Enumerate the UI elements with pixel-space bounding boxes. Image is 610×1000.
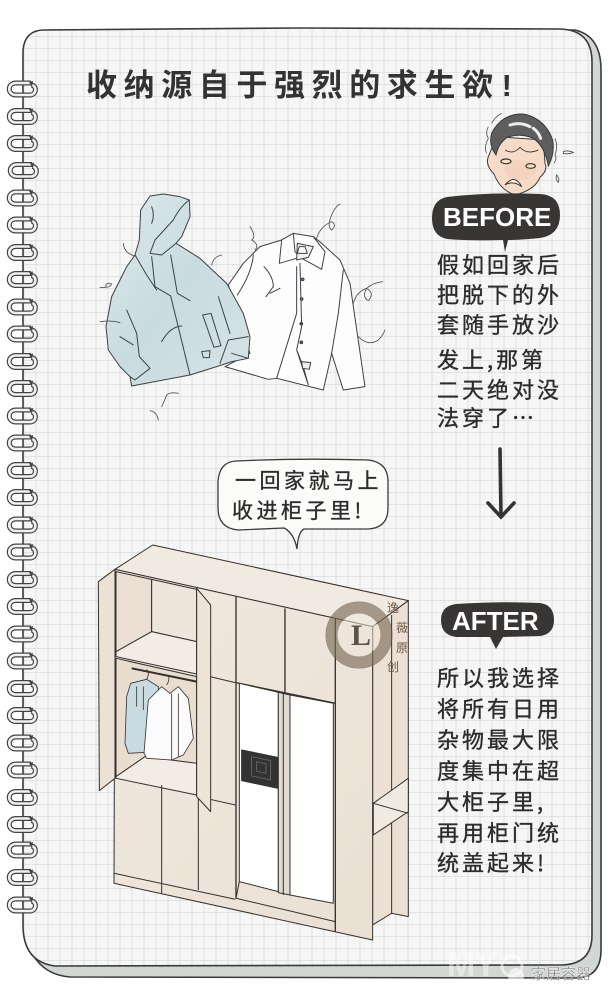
blue hooded jacket <box>106 194 250 386</box>
lower door lines <box>114 677 235 899</box>
text block: before <box>437 248 562 433</box>
open door left <box>98 569 115 791</box>
speech bubble: 收进柜子里! <box>232 495 365 525</box>
fridge <box>236 683 335 922</box>
open door right <box>197 588 211 812</box>
watermark: bottom right <box>447 946 591 984</box>
title: 收纳源自于强烈的求生欲! <box>86 68 519 103</box>
watermark: bottom right: MY <box>447 946 497 984</box>
watermark stamp: 创 <box>387 660 399 674</box>
watermark: bottom right: 家居容器 <box>531 966 591 983</box>
spiral binding rings <box>9 81 36 911</box>
watermark stamp: L <box>351 619 371 652</box>
text block: after <box>437 661 562 878</box>
white shirt jacket <box>225 233 365 390</box>
text block: after: 将所有日用 <box>437 692 562 724</box>
speech bubble <box>218 459 388 549</box>
hanging rail <box>132 668 197 682</box>
label: BEFORE <box>432 193 560 252</box>
text block: before: 法穿了… <box>437 401 537 433</box>
text block: after: 所以我选择 <box>437 661 562 693</box>
wrinkle squiggles <box>100 204 385 420</box>
watermark stamp: 逸 <box>387 601 399 615</box>
right side panel <box>373 601 408 925</box>
illustration: hooded jacket and white shirt jacket <box>100 194 385 420</box>
text block: before: 假如回家后 <box>437 248 562 280</box>
text block: after: 度集中在超 <box>437 754 562 786</box>
watermark stamp <box>326 601 408 674</box>
text block: after: 统盖起来! <box>437 846 547 878</box>
text block: before: 二天绝对没 <box>437 373 562 405</box>
label: AFTER: AFTER <box>452 606 539 636</box>
text block: before: 套随手放沙 <box>437 308 562 340</box>
open compartment <box>116 572 197 795</box>
speech bubble: 一回家就马上 <box>235 465 382 495</box>
arrow: down <box>488 449 514 517</box>
cabinet top <box>115 545 408 627</box>
text block: before: 把脱下的外 <box>437 278 562 310</box>
front face <box>114 569 373 940</box>
icon: worried man head <box>485 113 573 195</box>
illustration: wardrobe cabinet with fridge <box>98 545 408 940</box>
text block: after: 再用柜门统 <box>437 816 562 848</box>
watermark stamp: 原 <box>396 641 408 655</box>
label: BEFORE: BEFORE <box>443 202 551 232</box>
text block: after: 杂物最大限 <box>437 723 562 755</box>
label: AFTER <box>441 602 554 649</box>
text block: after: 大柜子里, <box>437 785 546 817</box>
upper door lines <box>236 597 335 932</box>
watermark stamp: 薇 <box>396 621 408 635</box>
hanging clothes <box>125 669 193 760</box>
text block: before: 发上,那第 <box>437 343 546 375</box>
